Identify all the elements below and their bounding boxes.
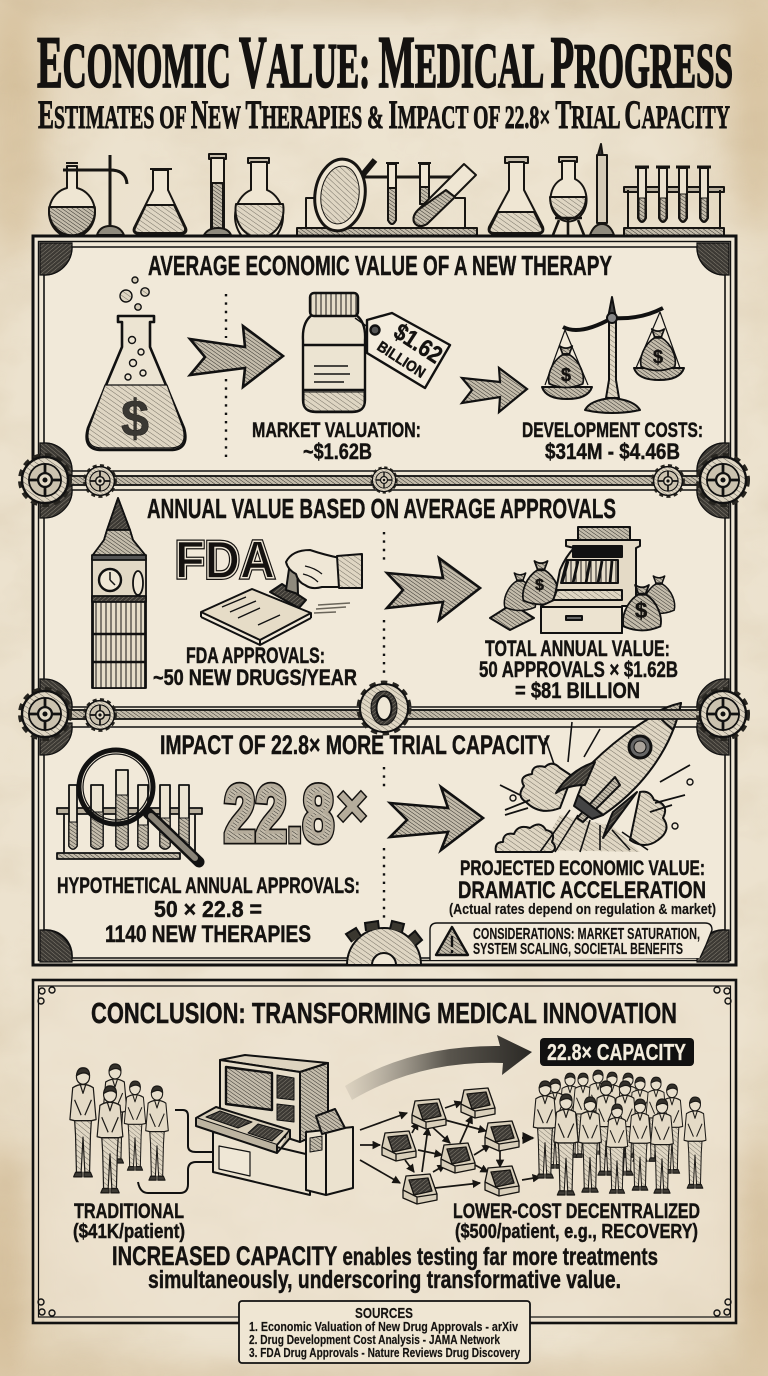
label: hypothetical approvals: 1140 NEW THERAPIES: [105, 921, 311, 948]
divider dots: [383, 532, 385, 673]
icon: medicine bottle with price tag: [303, 293, 450, 412]
label: FDA approvals: ~50 NEW DRUGS/YEAR: [153, 665, 357, 690]
conclusion statement: INCREASED CAPACITY enables testing far more treatments: [112, 1241, 658, 1271]
label: total annual value: TOTAL ANNUAL VALUE:: [485, 636, 670, 661]
icon: FDA logo: FDA: [175, 531, 275, 590]
label: total annual value: 50 APPROVALS × $1.62B: [479, 657, 678, 682]
label: lower-cost decentralized: [453, 1200, 700, 1243]
label: market valuation: MARKET VALUATION:: [252, 419, 421, 442]
panel: conclusion: [33, 980, 736, 1323]
callout: considerations: [430, 923, 712, 960]
icon: warning triangle: [436, 927, 468, 955]
curved arrow: [345, 1035, 532, 1100]
label: projected economic value: [449, 857, 716, 918]
panel: impact of trial capacity: [40, 703, 729, 965]
divider: gears band top: [22, 457, 746, 503]
price tag text: $1.62: [389, 318, 447, 369]
icon: balance scale with money bags: [542, 297, 684, 413]
label: hypothetical approvals: 50 × 22.8 =: [154, 896, 262, 922]
icon: FDA logo: FDA: [175, 531, 275, 590]
main frame with the three analysis panels: [22, 236, 746, 1363]
arrow: [190, 326, 283, 387]
label: hypothetical approvals: HYPOTHETICAL ANNUAL APPROVALS:: [57, 873, 360, 898]
icon: hand stamping documents: [201, 550, 362, 645]
label: hypothetical approvals: [57, 873, 360, 948]
icon: flask with dollar: [87, 277, 185, 450]
heading: IMPACT OF 22.8× MORE TRIAL CAPACITY: [160, 730, 550, 760]
label: development costs: $314M - $4.46B: [545, 439, 680, 464]
icon: flask with dollar: $: [121, 390, 149, 448]
label: total annual value: = $81 BILLION: [515, 678, 640, 703]
divider dots: [383, 767, 385, 918]
figures: traditional trial staff: [70, 1064, 168, 1193]
sources box: [239, 1301, 530, 1363]
subtitle: ESTIMATES OF NEW THERAPIES & IMPACT OF 22.8× TRIAL CAPACITY: [38, 92, 730, 137]
label: lower-cost decentralized: ($500/patient, e.g., RECOVERY): [455, 1221, 698, 1243]
label: total annual value: [479, 636, 678, 703]
price tag text: BILLION: [374, 338, 428, 382]
conclusion statement: [112, 1241, 658, 1294]
icon: cash register and money bags: $: [535, 577, 544, 594]
icon: balance scale with money bags: $: [561, 365, 571, 385]
icon: cash register and money bags: $: [635, 598, 647, 623]
big multiplier number: 22.8: [224, 769, 334, 858]
arrow: [390, 787, 483, 850]
big multiplier number: 22.8: [224, 769, 334, 858]
label: development costs: [522, 419, 703, 464]
label: development costs: DEVELOPMENT COSTS:: [522, 419, 703, 442]
arrow: [387, 558, 480, 620]
arrow: [462, 368, 527, 412]
conclusion statement: simultaneously, underscoring transformative value.: [148, 1266, 621, 1294]
label: market valuation: [252, 419, 421, 464]
cables: [138, 1110, 214, 1193]
icon: cash register and money bags: [490, 527, 675, 633]
figures: decentralized crowd: [533, 1070, 706, 1195]
capacity badge: 22.8× CAPACITY: [547, 1039, 686, 1065]
sources box: 1. Economic Valuation of New Drug Approvals - arXiv: [249, 1320, 518, 1334]
icon: test tubes and magnifying glass: [57, 750, 202, 862]
label: traditional: TRADITIONAL: [74, 1200, 184, 1223]
big multiplier number: ×: [337, 774, 367, 837]
icon: central computer terminal: [196, 1055, 353, 1195]
divider: gears band middle: [22, 684, 746, 737]
divider dots: [225, 294, 227, 458]
label: FDA approvals: [153, 643, 357, 690]
panel: average economic value: [40, 243, 729, 475]
big multiplier number: ×: [337, 774, 367, 837]
icon: decentralized network: [360, 1088, 540, 1204]
icon: clock tower: [92, 498, 146, 688]
sources box: SOURCES: [355, 1305, 413, 1322]
icon row: laboratory glassware shelf: [49, 144, 724, 244]
price tag text: [374, 318, 447, 382]
icon: balance scale with money bags: $: [653, 347, 663, 367]
label: projected economic value: (Actual rates depend on regulation & market): [449, 902, 716, 918]
panel: annual value: [40, 486, 729, 711]
label: market valuation: ~$1.62B: [303, 439, 372, 464]
icon: half gear: [346, 921, 422, 965]
sources box: 2. Drug Development Cost Analysis - JAMA Network: [249, 1333, 500, 1347]
label: FDA approvals: FDA APPROVALS:: [186, 643, 325, 668]
label: traditional: [73, 1200, 185, 1243]
icon: rocket launching with smoke: [496, 703, 693, 852]
label: traditional: ($41K/patient): [73, 1221, 185, 1243]
sources box: 3. FDA Drug Approvals - Nature Reviews Drug Discovery: [249, 1346, 520, 1360]
corner curls: [38, 987, 731, 1316]
